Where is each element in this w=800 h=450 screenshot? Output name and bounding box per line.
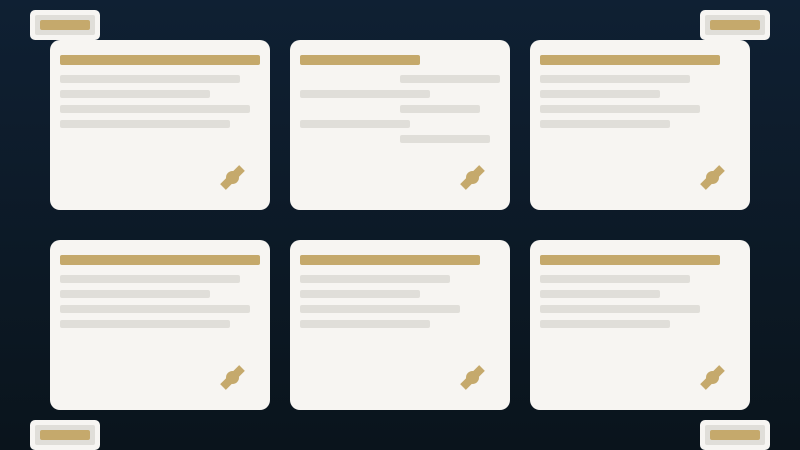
icon: card 3 pin — [703, 168, 722, 187]
icon: card 1 pin — [223, 168, 242, 187]
card 5 heading bar — [300, 255, 480, 265]
panel: card 2 — [290, 40, 510, 210]
card 3 text lines — [540, 75, 700, 128]
panel: card 4 — [50, 240, 270, 410]
card 3 heading bar — [540, 55, 720, 65]
icon: card 6 pin — [703, 368, 722, 387]
panel: card 1 — [50, 40, 270, 210]
corner tag: bottom right — [700, 420, 770, 450]
card 5 text lines — [300, 275, 460, 328]
card 6 text lines — [540, 275, 700, 328]
corner tag: bottom left — [30, 420, 100, 450]
card 4 heading bar — [60, 255, 260, 265]
panel: card 6 — [530, 240, 750, 410]
corner tag: top left — [30, 10, 100, 40]
panel: card 5 — [290, 240, 510, 410]
card 4 text lines — [60, 275, 250, 328]
card 2 staggered text lines — [300, 75, 500, 143]
card 6 heading bar — [540, 255, 720, 265]
icon: card 5 pin — [463, 368, 482, 387]
card 1 heading bar — [60, 55, 260, 65]
icon: card 2 pin — [463, 168, 482, 187]
panel: card 3 — [530, 40, 750, 210]
card 2 heading bar — [300, 55, 420, 65]
card 1 text lines — [60, 75, 250, 128]
icon: card 4 pin — [223, 368, 242, 387]
corner tag: top right — [700, 10, 770, 40]
